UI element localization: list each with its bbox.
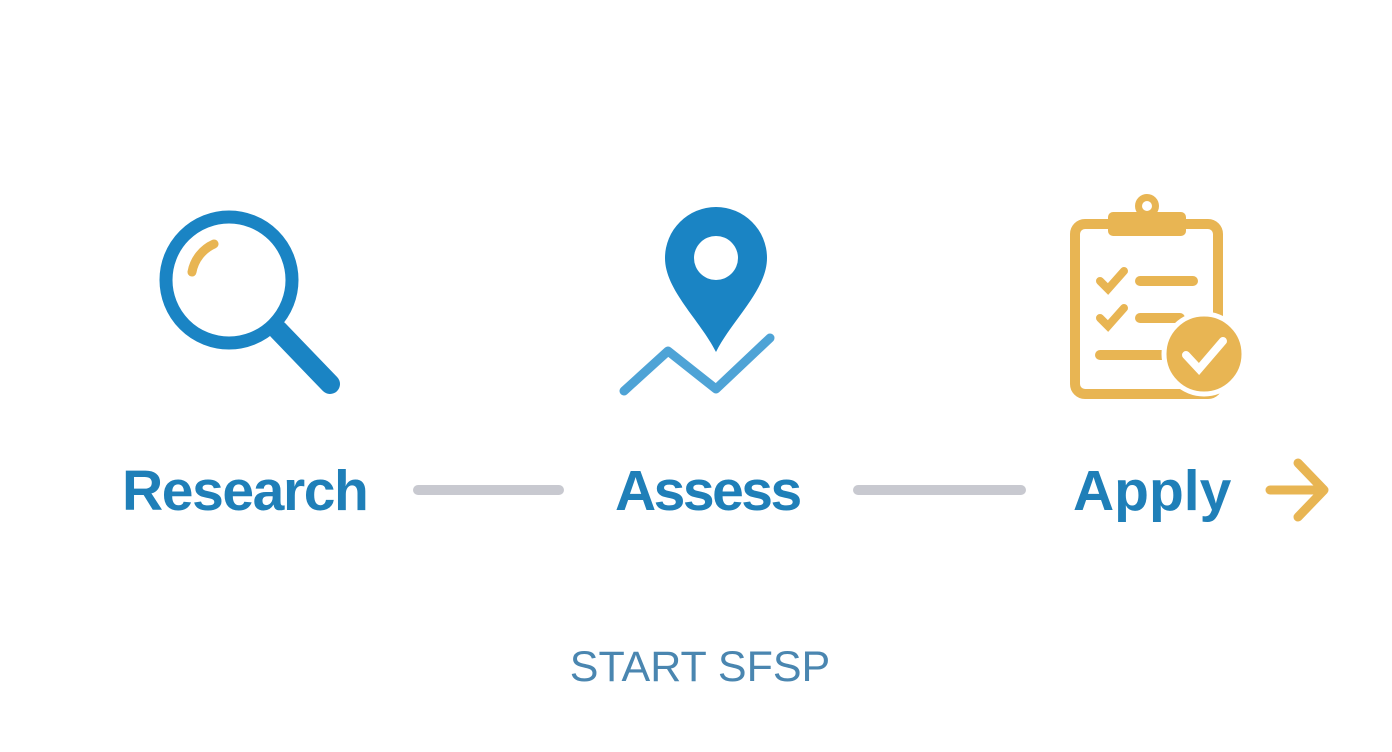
label: Apply: Apply bbox=[1073, 459, 1231, 523]
label: Assess: Assess bbox=[615, 459, 800, 523]
connector line 1 bbox=[413, 485, 564, 495]
connector line 2 bbox=[853, 485, 1026, 495]
label: Research: Research bbox=[122, 459, 367, 523]
arrow bbox=[1266, 458, 1328, 522]
caption: START SFSP: START SFSP bbox=[570, 643, 830, 691]
